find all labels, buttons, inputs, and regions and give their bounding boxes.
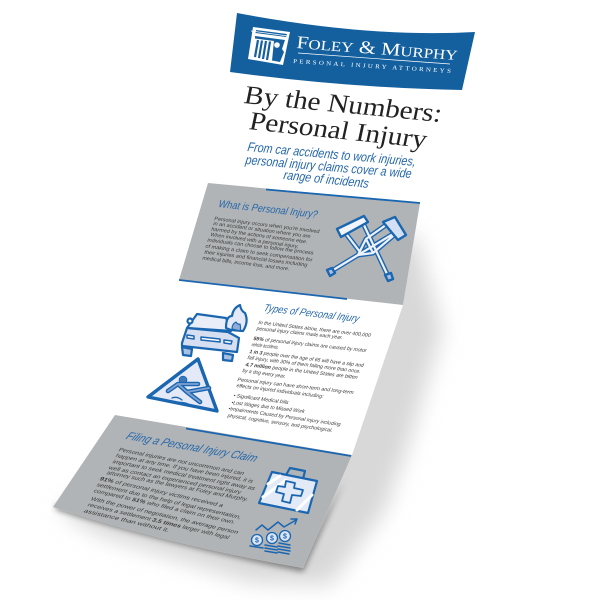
panel: what is personal injury <box>179 183 420 305</box>
text block <box>226 320 372 434</box>
icon: crutches <box>327 216 406 281</box>
subtitle: From car accidents to work injuries, <box>247 139 417 169</box>
paper sheet <box>53 13 475 568</box>
text block: vehicle accidents. <box>250 342 280 351</box>
text block: settlement due to the help of legal representation, <box>95 482 243 520</box>
text block: happen at any time. If you have been injured, it is <box>114 453 255 485</box>
text block: attorney such as the lawyers at Foley and Murphy. <box>105 470 250 503</box>
text block: in an accident or situation where you are <box>212 221 311 240</box>
subtitle: range of incidents <box>282 167 371 191</box>
text block: physical, cognitive, sensory, and psychological. <box>226 413 334 434</box>
subtitle: personal injury claims cover a wide <box>244 152 413 181</box>
panel: filing a personal injury claim <box>53 415 352 568</box>
text block: of making a claim to seek compensation for <box>204 244 313 263</box>
text block: 4.7 million people in the United States are bitten <box>244 362 359 381</box>
text block: •Lost Wages due to Missed Work <box>230 400 306 415</box>
firm name: FOLEY & M URPHY <box>296 32 459 64</box>
text block: harmed by the actions of someone else. <box>210 227 309 245</box>
rule <box>298 53 450 64</box>
heading: What is Personal Injury? <box>217 198 319 221</box>
text block: well as contact an experienced personal injury <box>106 465 243 496</box>
text block: medical bills, income loss, and more. <box>201 256 291 272</box>
text block: by a dog every year. <box>241 368 287 380</box>
text block <box>82 447 257 541</box>
icon: first aid kit <box>259 468 317 513</box>
text block: Personal injury can have short-term and long-term <box>236 377 355 396</box>
text block: individuals can choose to follow the process <box>206 238 314 256</box>
icon: coins and rising arrow: $ <box>270 536 274 542</box>
text block: When involved with a personal injury, <box>209 232 300 250</box>
icon: coins and rising arrow: $ <box>255 538 259 544</box>
paper shadow <box>56 230 442 585</box>
title <box>242 80 445 154</box>
icon: column logo <box>248 27 290 65</box>
text block: 55% of personal injury claims are caused by motor <box>252 336 368 354</box>
text block: 1 in 3 people over the age of 65 will have a slip and <box>248 349 365 369</box>
header banner <box>230 13 475 90</box>
heading: Types of Personal Injury <box>262 302 362 325</box>
icon: burning car <box>182 305 247 361</box>
panel: types of personal injury <box>148 302 372 434</box>
subtitle <box>244 139 417 191</box>
text block: compared to 51% who filed a claim on their own. <box>92 488 237 526</box>
icon: coins and rising arrow <box>250 519 297 554</box>
firm tagline: PERSONAL INJURY ATTORNEYS <box>293 59 453 75</box>
text block: receives a settlement 3.5 times larger with legal <box>86 502 231 541</box>
text block: •Impairments Caused by Personal Injury including <box>227 406 342 428</box>
text block: their injuries and financial losses including <box>203 250 308 268</box>
text block: personal injury claims made each year. <box>255 326 344 341</box>
icon: coins and rising arrow: $ <box>283 534 287 540</box>
icon: slip hazard triangle <box>148 359 217 411</box>
heading: Filing a Personal Injury Claim <box>123 429 261 464</box>
text block: Personal injury occurs when you're involved <box>213 216 320 235</box>
text block: Personal injuries are not uncommon and can <box>117 447 246 477</box>
title: Personal Injury <box>247 106 430 154</box>
text block: assistance than without it. <box>82 508 171 533</box>
text block: • Significant Medical bills <box>232 393 290 406</box>
text block: effects on injured individuals including: <box>235 383 325 400</box>
text block: important to seek medical treatment right away as <box>111 459 257 492</box>
text block: In the United States alone, there are over 400,000 <box>257 320 372 339</box>
text block: With the power of negotiation, the average person <box>89 496 240 536</box>
text block <box>201 216 320 272</box>
text block: 91% of personal injury victims received a <box>98 476 225 509</box>
text block: fall injury, with 30% of them falling more than once. <box>246 355 362 375</box>
title: By the Numbers: <box>242 80 445 128</box>
